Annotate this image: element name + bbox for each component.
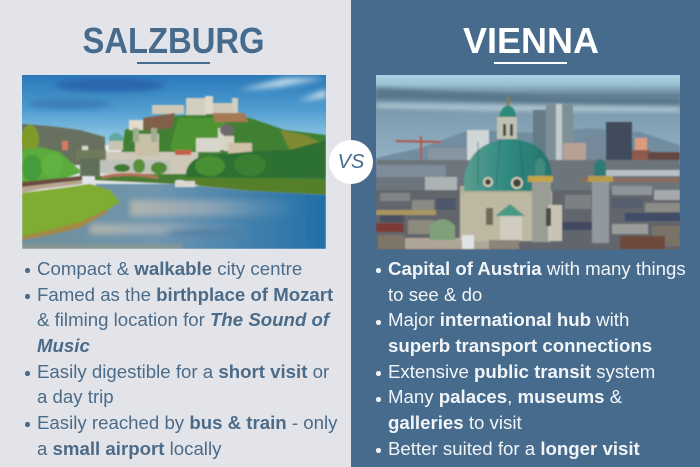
badge: VS — [329, 140, 373, 184]
text block: Salzburg bullet list: Famed as the birthplace of Mozart — [37, 284, 333, 305]
text block: Salzburg bullet list — [25, 258, 338, 459]
text block: Vienna bullet list: galleries to visit — [388, 412, 522, 433]
lantern — [497, 117, 517, 139]
text block: Salzburg bullet list: Music — [37, 335, 90, 356]
text block: Salzburg bullet list: & filming location for The Sound of — [37, 309, 329, 330]
panel: Vienna background — [351, 0, 700, 467]
text block: Vienna bullet list: Many palaces, museums & — [388, 386, 622, 407]
text block: Vienna bullet list: Major international hub with — [388, 309, 629, 330]
castle hill — [120, 113, 326, 180]
photo: Salzburg riverside and fortress — [22, 75, 326, 249]
text block: Vienna bullet list: Capital of Austria with many things — [388, 258, 686, 279]
columns — [532, 180, 551, 242]
text block: Vienna bullet list: to see & do — [388, 284, 482, 305]
text block: Salzburg bullet list: Easily digestible for a short visit or — [37, 361, 329, 382]
text block: Salzburg bullet list: a day trip — [37, 386, 114, 407]
badge: VS: VS — [338, 151, 364, 173]
fortress — [152, 105, 184, 114]
heading underline: Salzburg — [137, 62, 210, 64]
town buildings — [98, 152, 198, 174]
text block: Vienna bullet list: superb transport connections — [388, 335, 652, 356]
heading: Salzburg: SALZBURG — [82, 20, 264, 61]
text block: Salzburg bullet list: Easily reached by bus & train - only — [37, 412, 337, 433]
distant hills — [376, 128, 680, 175]
far bank — [176, 178, 326, 195]
text block: Salzburg bullet list: a small airport locally — [37, 438, 221, 459]
rooftops — [376, 186, 680, 250]
distant hill — [22, 124, 105, 165]
tree lines — [21, 125, 39, 153]
church body — [460, 191, 552, 241]
left bank — [22, 184, 120, 238]
text block: Vienna bullet list: Better suited for a longer visit — [388, 438, 640, 459]
text block: Vienna bullet list: Extensive public transit system — [388, 361, 655, 382]
water — [22, 184, 326, 249]
heading underline: Vienna — [494, 62, 567, 64]
heading: Vienna: VIENNA — [463, 20, 599, 61]
photo: Vienna Karlskirche and skyline — [376, 75, 680, 250]
skyline — [467, 130, 489, 166]
text block: Salzburg bullet list: Compact & walkable city centre — [37, 258, 302, 279]
bridge and boat — [102, 173, 158, 179]
